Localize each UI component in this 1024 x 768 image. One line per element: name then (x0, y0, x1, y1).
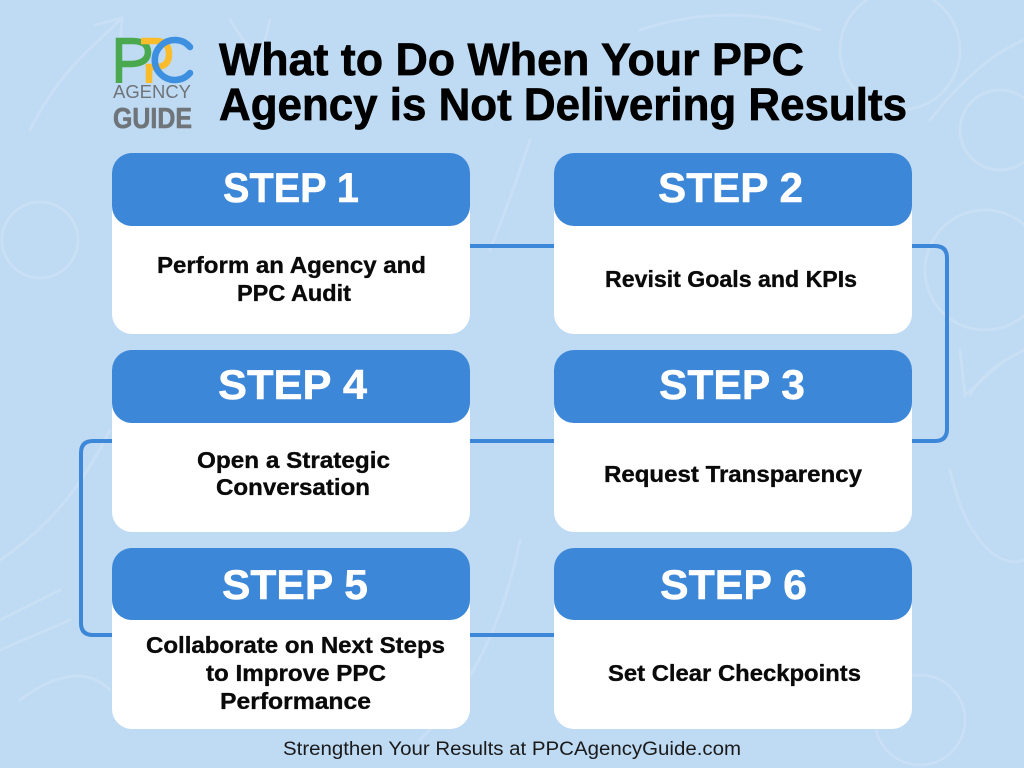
panel: step 1: Perform an Agency and (157, 252, 426, 278)
panel: step 2 (554, 153, 912, 334)
panel: step 4: STEP 4 (218, 361, 368, 408)
panel: step 4 (112, 350, 470, 532)
panel: step 3: STEP 3 (659, 361, 805, 408)
panel: step 5: STEP 5 (222, 561, 368, 608)
title (219, 34, 907, 130)
panel: step 3 (554, 350, 912, 532)
panel: step 4: Open a Strategic (197, 447, 390, 473)
connector lines between steps (81, 246, 947, 635)
panel: step 2: Revisit Goals and KPIs (605, 266, 857, 292)
panel: step 5: to Improve PPC (206, 660, 386, 686)
panel: step 3: Request Transparency (604, 461, 862, 487)
panel: step 2: STEP 2 (658, 164, 803, 211)
panel: step 6: STEP 6 (660, 561, 807, 608)
panel: step 6: Set Clear Checkpoints (608, 660, 861, 686)
panel: step 5: Performance (220, 688, 371, 714)
title: Agency is Not Delivering Results (219, 79, 907, 130)
logo: PPC Agency Guide (113, 40, 192, 135)
panel: step 6 (554, 548, 912, 729)
panel: step 4: Conversation (216, 474, 370, 500)
title: What to Do When Your PPC (219, 34, 804, 85)
footer text: Strengthen Your Results at PPCAgencyGuide.com (283, 739, 741, 760)
panel: step 1 (112, 153, 470, 334)
logo: PPC Agency Guide: AGENCY (113, 82, 191, 102)
logo: PPC Agency Guide: GUIDE (113, 103, 192, 135)
panel: step 1: STEP 1 (223, 164, 359, 211)
panel: step 5: Collaborate on Next Steps (146, 632, 445, 658)
panel: step 1: PPC Audit (237, 280, 351, 306)
panel: step 5 (112, 548, 470, 729)
